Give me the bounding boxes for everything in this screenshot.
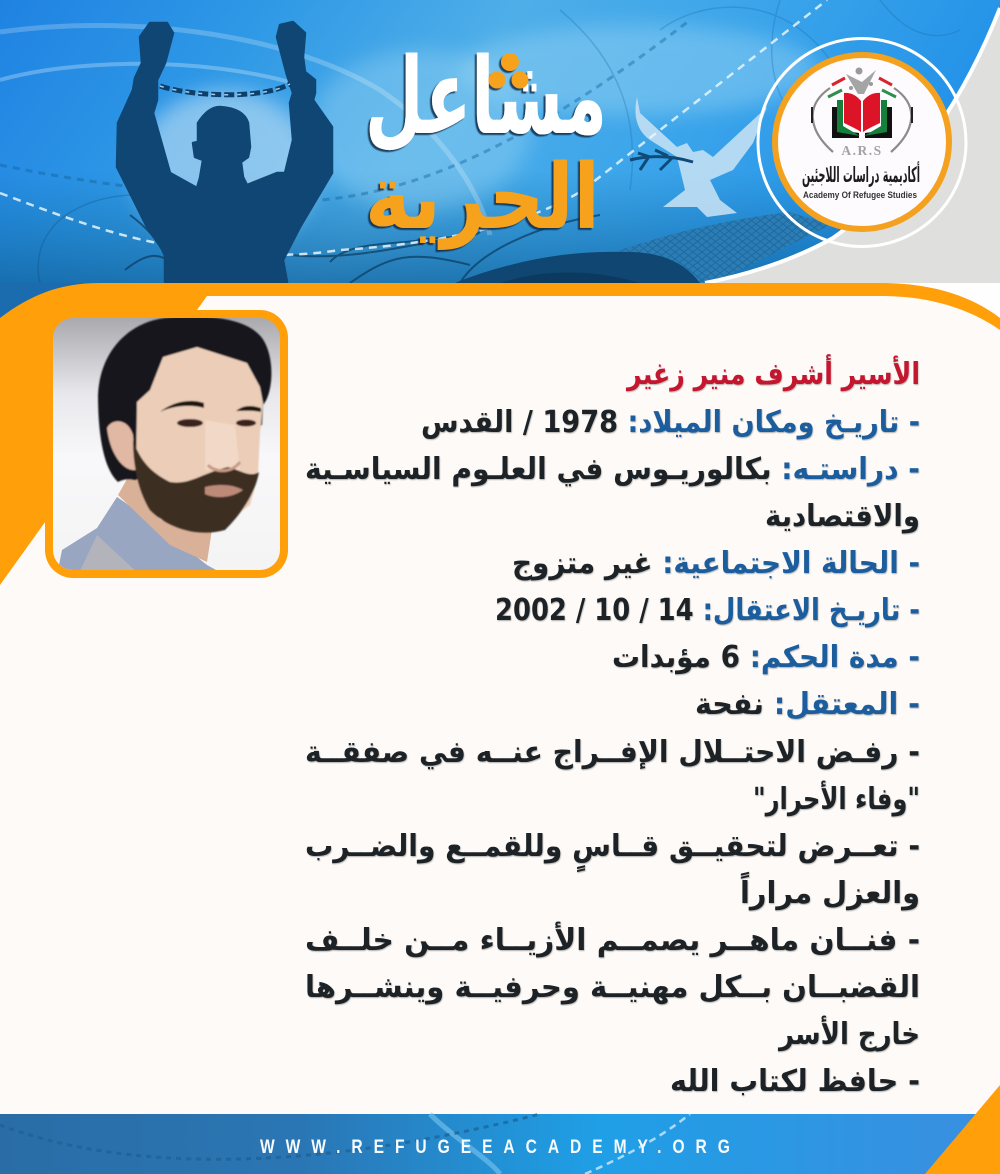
logo initials: A.R.S [841,143,883,158]
prisoner name: الأسير أشرف منير زغير [625,354,920,392]
header banner [0,0,1000,333]
orange band and content panel [0,283,1000,1114]
studies line 2: والاقتصادية [765,499,920,534]
eyes [177,419,203,427]
beard [133,440,259,533]
note 1 line 1: - رفـض الاحتــلال الإفــراج عنــه في صفقــة [305,735,920,770]
studies line 1: - دراستـه: بكالوريـوس في العلـوم السياسـية [305,452,920,487]
dove [630,97,767,217]
barbed wire [125,215,600,283]
footer [0,1114,1000,1174]
title word: white: مشاعل [365,35,607,158]
hair [98,317,271,482]
title word: orange: الحرية [365,145,600,250]
note 4: - حافظ لكتاب الله [670,1064,920,1099]
arrest date: - تاريـخ الاعتقال: 14 / 10 / 2002 [495,593,920,628]
photo frame [45,310,288,578]
note 3 line 2: القضبــان بــكل مهنيــة وحرفيــة وينشــرها [305,970,920,1005]
sentence: - مدة الحكم: 6 مؤبدات [612,640,920,675]
marital status: - الحالة الاجتماعية: غير متزوج [512,546,920,581]
website: WWW.REFUGEEACADEMY.ORG [260,1136,730,1157]
ground and fence [616,212,828,283]
title [365,35,607,250]
prisoner silhouette [117,22,332,282]
nose shadow [208,462,240,471]
biography text [305,354,920,1099]
shirt [59,497,216,570]
note 2 line 1: - تعــرض لتحقيــق قــاسٍ وللقمــع والضــرب [305,829,920,873]
neck [118,478,212,562]
logo english name: Academy Of Refugee Studies [803,190,917,201]
note 3 line 3: خارج الأسر [777,1015,920,1052]
eyebrows [160,401,204,412]
dashed wire line [0,0,827,255]
title dots: orange [488,53,528,88]
corner triangle [925,1085,1000,1174]
face [136,347,263,530]
logo book [832,93,892,138]
prison: - المعتقل: نفحة [695,687,920,722]
ear [107,421,136,470]
note 1 line 2: "وفاء الأحرار" [753,780,920,817]
birth line: - تاريـخ ومكان الميلاد: 1978 / القدس [421,405,920,440]
logo badge [758,38,966,246]
note 3 line 1: - فنــان ماهــر يصمــم الأزيــاء مــن خلــف [305,921,920,958]
note 2 line 2: والعزل مراراً [740,871,920,911]
portrait [53,317,280,575]
logo arcs and figure [812,68,912,152]
